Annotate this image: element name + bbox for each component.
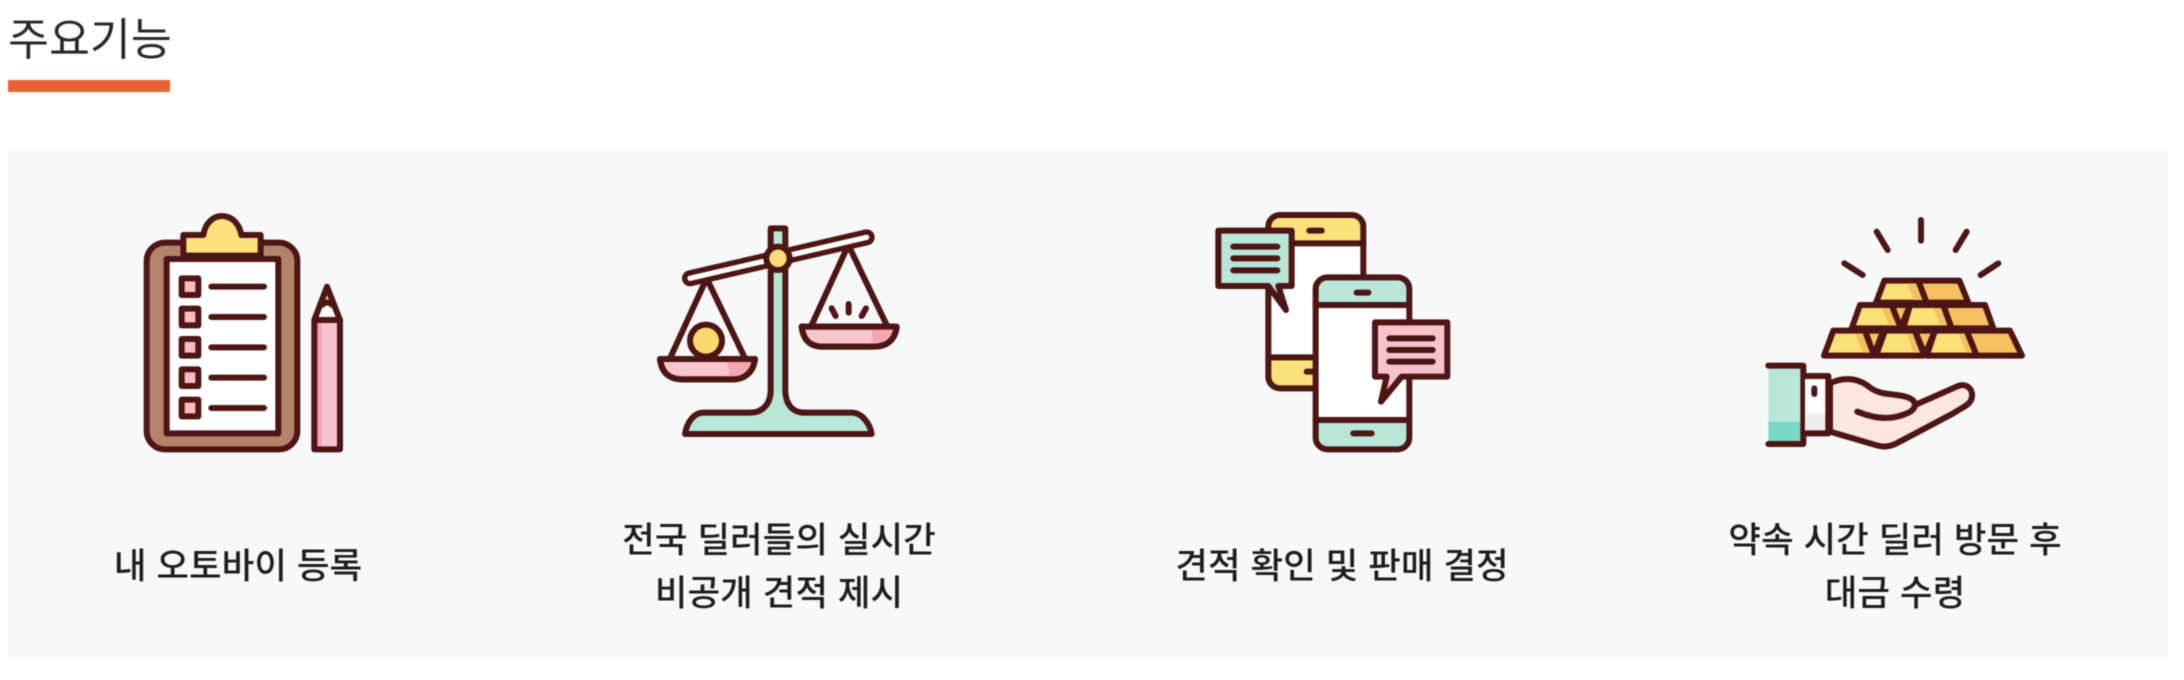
label: feature 3: 견적 확인 및 판매 결정 [1175,546,1509,586]
heading underline [8,80,170,92]
icon: balance scale [660,228,897,434]
label: feature 2: 전국 딜러들의 실시간 [622,520,936,560]
icon: gold bars on open hand [1768,220,2022,446]
panel: features background [8,150,2168,658]
label: feature 4: 약속 시간 딜러 방문 후 [1728,520,2062,560]
icon: clipboard and pencil [147,216,340,449]
label: feature 2: 비공개 견적 제시 [655,573,903,613]
label: feature 4: 대금 수령 [1825,573,1965,613]
label: feature 1: 내 오토바이 등록 [114,546,362,586]
icon: phones with chat bubbles [1218,215,1447,449]
heading: 주요기능: 주요기능 [8,16,172,65]
